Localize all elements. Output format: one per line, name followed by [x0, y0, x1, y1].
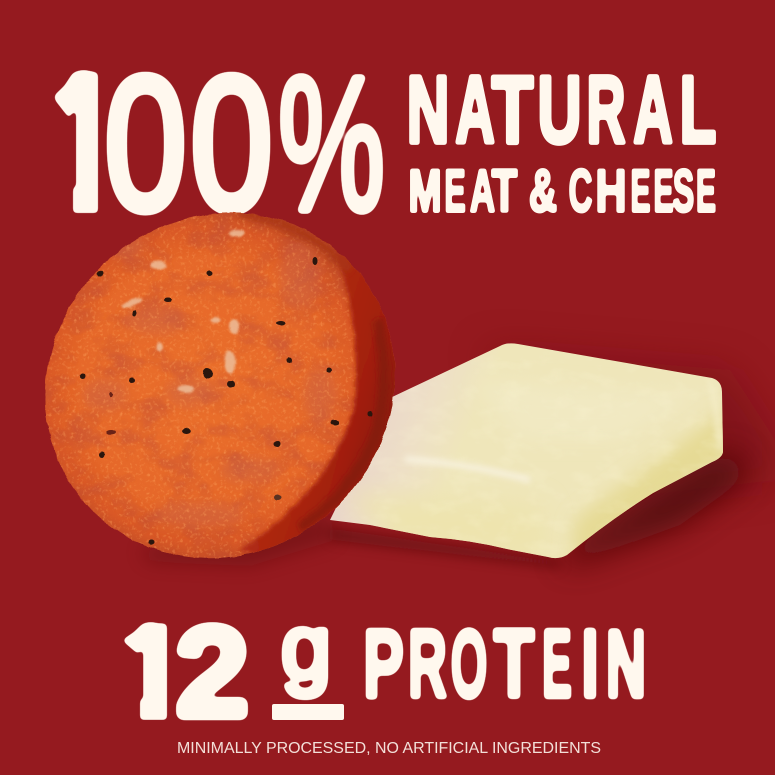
heading: NATURAL: L — [680, 56, 716, 163]
photo: cheese slice — [330, 343, 723, 558]
heading: MEAT & CHEESE: E — [630, 158, 651, 225]
meaty mottling — [40, 205, 360, 560]
footnote: MINIMALLY PROCESSED, NO ARTIFICIAL INGREDIENTS — [177, 740, 601, 757]
heading: MEAT & CHEESE — [408, 157, 716, 225]
title: 100%: % — [278, 36, 385, 251]
heading: NATURAL: A — [633, 55, 673, 164]
peppercorns — [80, 257, 372, 544]
food shadows — [140, 350, 775, 568]
stat: 12 g PROTEIN: g — [281, 597, 331, 698]
pepperoni face — [40, 205, 400, 565]
cheese grain — [408, 386, 718, 472]
heading: MEAT & CHEESE: A — [470, 159, 495, 225]
cheese right-top rim — [712, 385, 720, 450]
pepperoni disc — [0, 142, 465, 629]
stat: 12 g PROTEIN: R — [408, 609, 447, 718]
heading: MEAT & CHEESE: & — [529, 157, 557, 225]
stat: 12 g PROTEIN: E — [542, 611, 572, 719]
stat: 12 g PROTEIN: 2 — [177, 604, 247, 738]
heading: NATURAL: N — [407, 56, 449, 163]
pepperoni details — [45, 212, 396, 559]
stat: 12 g PROTEIN: N — [606, 609, 646, 718]
cheese top light — [514, 401, 634, 422]
heading: NATURAL — [407, 55, 716, 164]
heading: MEAT & CHEESE: T — [492, 157, 518, 224]
title: 100% — [54, 70, 384, 216]
stat: 12 g PROTEIN: 1 — [118, 599, 187, 744]
stat: 12 g PROTEIN: O — [451, 610, 487, 719]
heading: MEAT & CHEESE: E — [696, 158, 716, 225]
cheese front face shade — [345, 495, 555, 565]
heading: MEAT & CHEESE: E — [444, 158, 466, 225]
g underline — [272, 704, 344, 720]
heading: MEAT & CHEESE: E — [653, 158, 674, 225]
stat: 12 g PROTEIN: T — [494, 610, 535, 718]
cheese highlight — [405, 459, 530, 480]
cheese right side shade — [566, 411, 723, 556]
heading: MEAT & CHEESE: H — [595, 159, 627, 225]
heading: NATURAL: T — [492, 56, 533, 163]
bright grain — [40, 205, 360, 560]
heading: NATURAL: A — [455, 55, 495, 164]
top right brown edge — [240, 212, 350, 270]
title: 100%: 0 — [105, 37, 186, 249]
fat flecks — [121, 230, 245, 393]
heading: NATURAL: R — [586, 55, 626, 164]
heading: MEAT & CHEESE: C — [569, 158, 592, 225]
heading: MEAT & CHEESE: S — [673, 158, 694, 225]
dark rim crescent — [238, 254, 396, 554]
meaty patches — [83, 231, 336, 527]
heading: NATURAL: U — [537, 57, 582, 164]
stat: 12 g PROTEIN: P — [363, 611, 404, 719]
cheese base — [330, 343, 723, 558]
title: 100%: 1 — [47, 33, 121, 252]
heading: MEAT & CHEESE: M — [408, 157, 442, 224]
photo: pepperoni slice — [45, 212, 396, 559]
rim darkest crust — [300, 320, 384, 528]
stat: 12 g PROTEIN — [124, 622, 644, 720]
title: 100%: 0 — [191, 37, 272, 249]
stat: 12 g PROTEIN: I — [581, 611, 599, 718]
